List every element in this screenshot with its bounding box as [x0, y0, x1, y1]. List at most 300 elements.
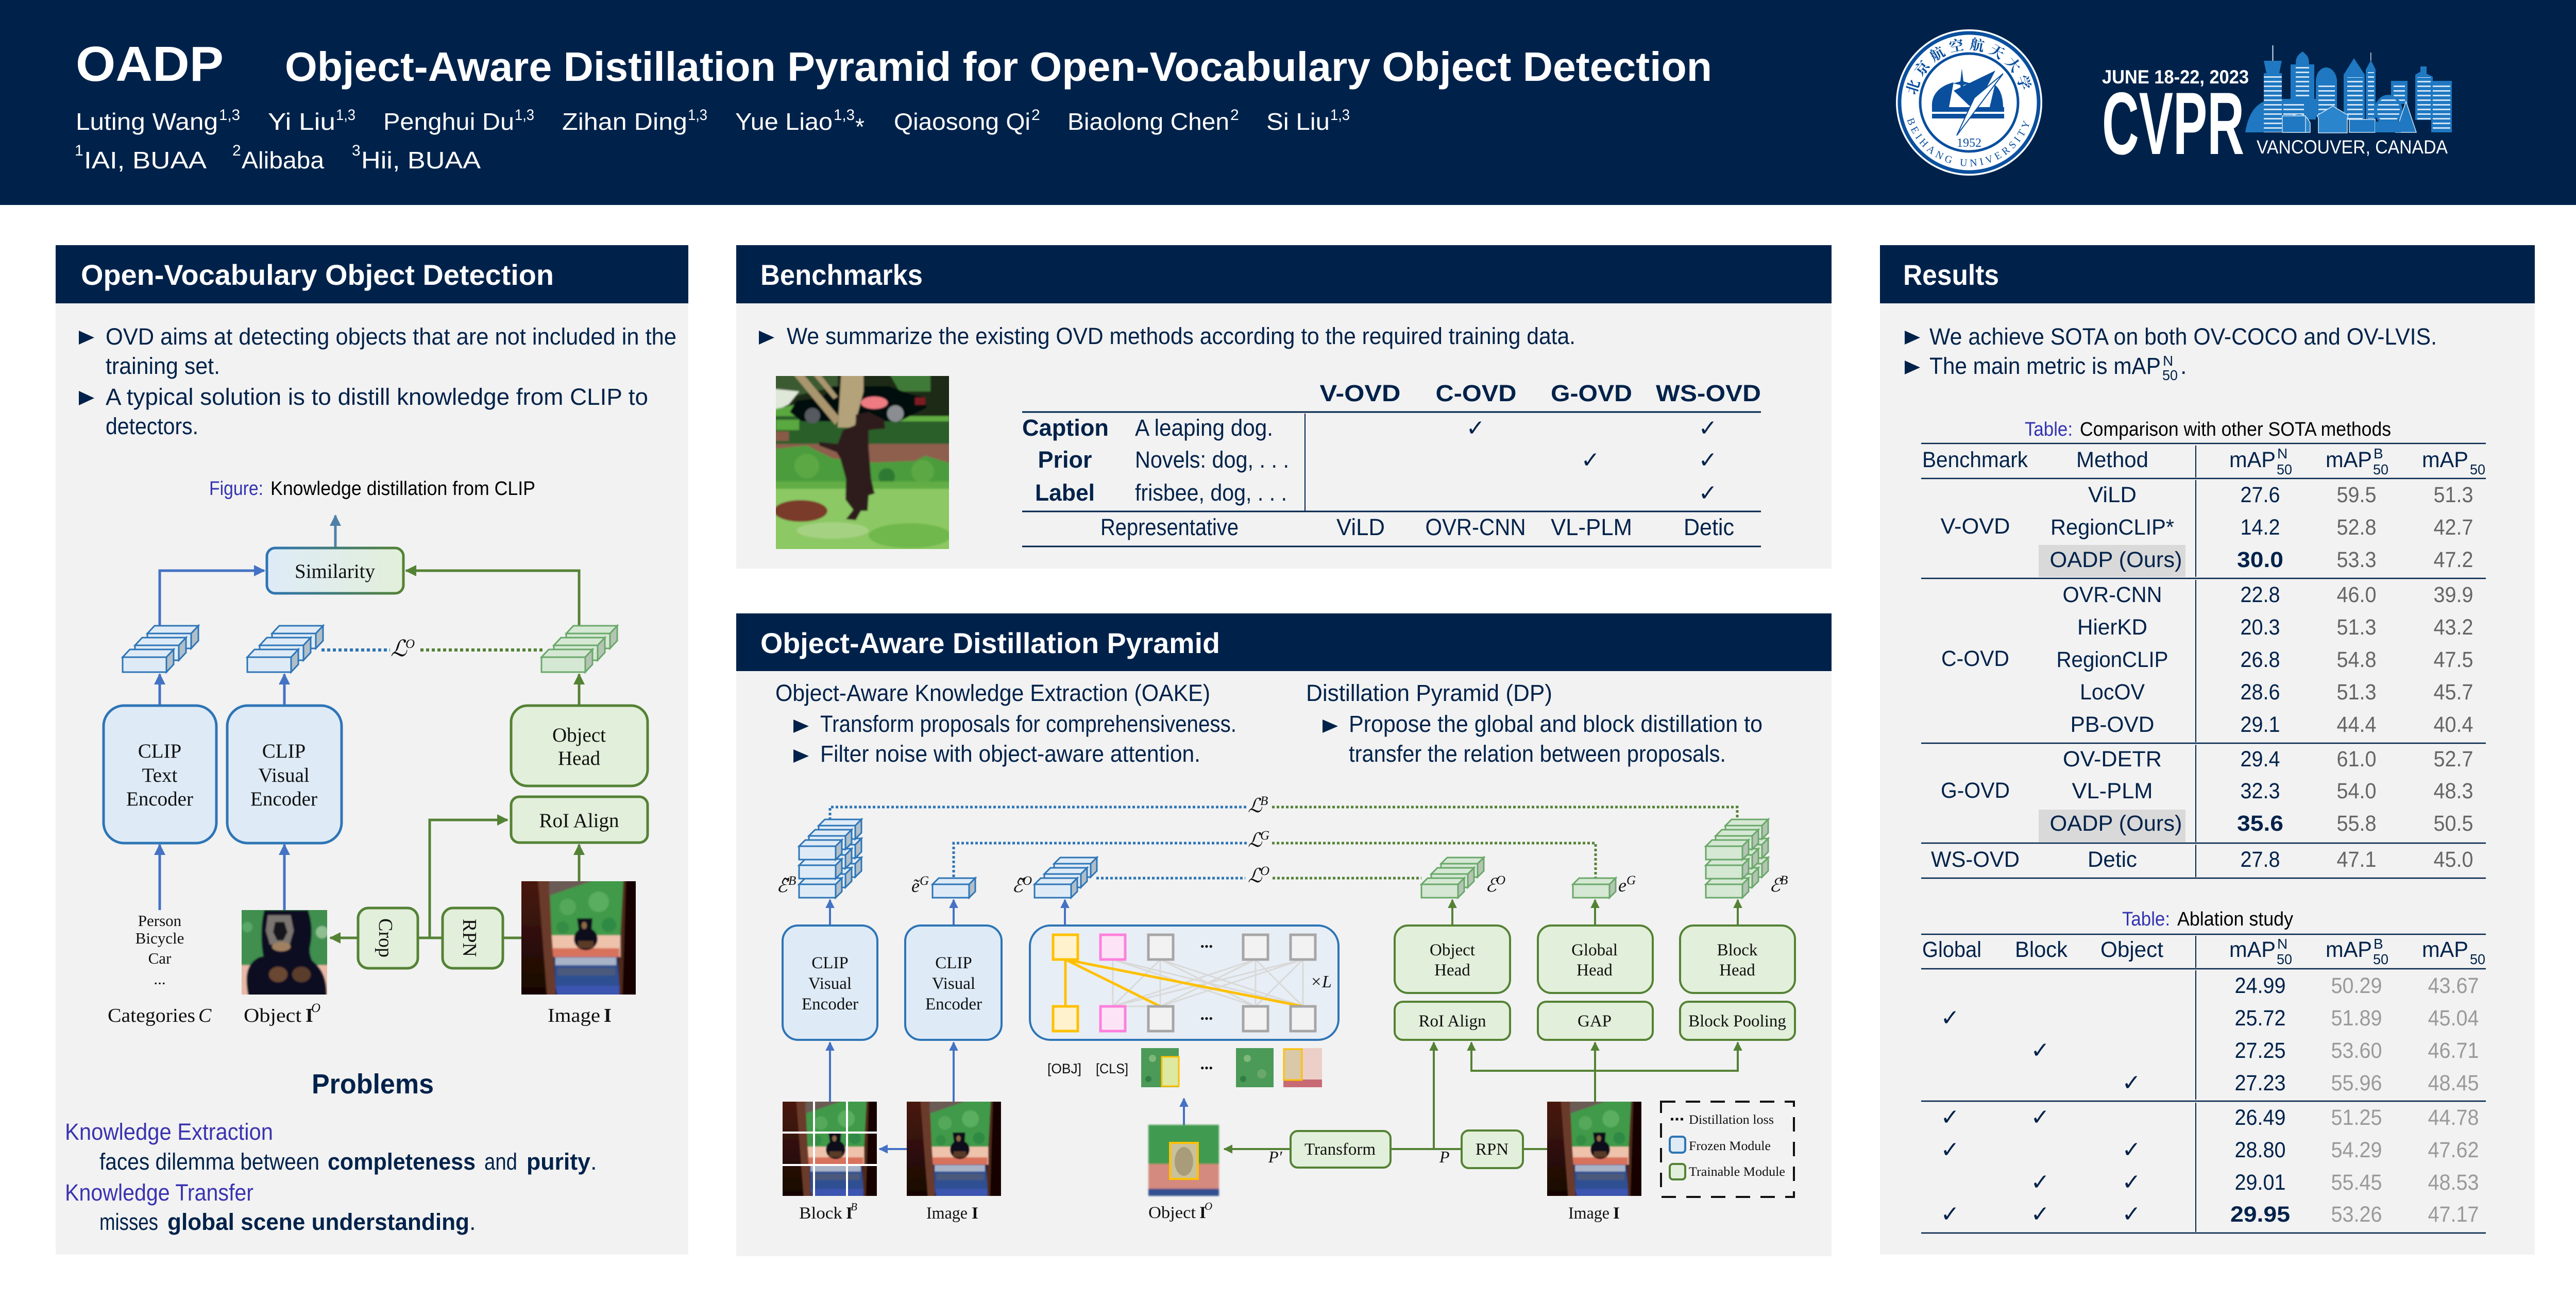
box: object head: Object — [1430, 941, 1475, 960]
table header: WS-OVD — [1656, 380, 1761, 406]
affiliations: Hii, BUAA — [361, 147, 481, 174]
values: mAP N50: 27.6 — [2240, 483, 2280, 507]
values: mAP N50: 20.3 — [2240, 615, 2280, 640]
bullet text — [1905, 323, 2437, 383]
box: CLIP visual encoder: Visual — [258, 764, 310, 786]
text: example categories: Bicycle — [135, 929, 184, 947]
photo: image — [1545, 1100, 1643, 1198]
authors: 1,3 — [834, 107, 855, 124]
feature stack: student object — [1421, 858, 1484, 898]
authors: Si Liu — [1266, 108, 1330, 135]
figure caption: Figure: — [209, 478, 263, 500]
feature stack: teacher object — [1035, 858, 1097, 898]
labels: inputs: O — [311, 1001, 320, 1015]
text block: problems: Knowledge Transfer — [65, 1179, 253, 1206]
bullet text: . — [2180, 353, 2187, 379]
bullet text block: training set. — [106, 353, 220, 379]
check marks: ✓ — [1941, 1005, 1959, 1031]
feature labels: teacher: ẽ — [911, 876, 920, 896]
check marks: ✓ — [2122, 1137, 2141, 1163]
box: Crop — [358, 908, 418, 968]
panel heading: Object-Aware Distillation Pyramid — [760, 627, 1220, 659]
authors: Luting Wang — [76, 108, 218, 135]
distillation loss lines: ℒ — [1248, 865, 1263, 887]
box: RPN: RPN — [1476, 1140, 1509, 1159]
legend: Frozen Module — [1689, 1139, 1771, 1153]
loss: distillation L^O — [321, 636, 543, 661]
values: mAP N50: 22.8 — [2240, 583, 2280, 607]
values: mAP N50: 25.72 — [2235, 1006, 2285, 1031]
arrow: text feature to similarity — [160, 571, 264, 626]
distillation loss lines: ℒ — [1248, 795, 1263, 817]
text: example categories: Person — [138, 912, 182, 930]
panel heading: Results — [1903, 259, 1999, 291]
labels: input images — [799, 1200, 1620, 1223]
values: mAP N50 — [2230, 973, 2290, 1227]
table header: 50 — [2373, 951, 2388, 967]
benchmark labels: V-OVD — [1940, 514, 2010, 539]
labels: input images: I — [1613, 1204, 1620, 1223]
table caption: ablation: Table: — [2122, 909, 2170, 930]
text block: DP — [1306, 680, 1762, 767]
table row: representative: ViLD — [1336, 514, 1385, 540]
table row: representative: VL-PLM — [1551, 514, 1632, 540]
distillation loss lines — [830, 794, 1737, 887]
method names: PB-OVD — [2070, 712, 2155, 737]
bullet text: We achieve SOTA on both OV-COCO and OV-LVIS. — [1929, 323, 2437, 350]
method names: OVR-CNN — [2063, 583, 2162, 607]
values: mAP 50: 42.7 — [2434, 515, 2473, 540]
photo: cropped dog — [242, 910, 327, 995]
box: RoI Align: RoI Align — [1418, 1012, 1486, 1031]
box: Transform — [1291, 1131, 1391, 1168]
box: CLIP text encoder — [104, 706, 216, 843]
bullet text block: detectors. — [106, 413, 198, 439]
affiliations: 2 — [232, 142, 241, 159]
header banner — [0, 0, 2576, 205]
labels: input images: O — [1205, 1200, 1212, 1212]
text block: problems: misses — [99, 1209, 158, 1235]
arrows: trainable path: P′ — [1268, 1147, 1283, 1166]
check marks: ✓ — [2031, 1104, 2049, 1130]
box: object head: Head — [558, 747, 601, 769]
benchmark labels — [1931, 514, 2020, 872]
text block: problems: purity — [527, 1149, 590, 1175]
photo: leaping dog — [773, 373, 952, 552]
check marks: ✓ — [1941, 1104, 1959, 1130]
box: CLIP visual encoder (image): Encoder — [925, 995, 982, 1014]
feature labels: student — [1485, 873, 1788, 896]
labels: inputs: Object — [244, 1005, 301, 1026]
table row: representative: Detic — [1684, 514, 1734, 540]
panel heading — [56, 245, 688, 303]
values: mAP B50: 54.8 — [2337, 647, 2376, 672]
feature stack: student block — [1706, 819, 1768, 898]
legend: Trainable Module — [1689, 1165, 1785, 1179]
labels: inputs — [108, 1001, 612, 1026]
text block: problems: . — [469, 1209, 476, 1235]
check marks: ✓ — [2122, 1169, 2141, 1195]
table row: caption — [1022, 415, 1717, 441]
text block: problems: faces dilemma between — [99, 1149, 319, 1175]
values: mAP B50: 55.96 — [2331, 1071, 2382, 1095]
values: mAP 50: 45.7 — [2434, 680, 2473, 705]
arrows: trainable path — [1224, 900, 1738, 1166]
distillation loss lines: O — [1260, 864, 1269, 878]
box: RoI Align — [511, 797, 648, 843]
method names: RegionCLIP* — [2050, 515, 2174, 540]
logo: Beihang University seal — [1896, 29, 2042, 176]
table row: caption: Caption — [1022, 415, 1109, 441]
box: CLIP visual encoder: CLIP — [262, 740, 306, 762]
values: mAP B50: 55.45 — [2331, 1170, 2382, 1195]
distillation loss lines: G — [1260, 829, 1269, 843]
values: mAP N50: 27.25 — [2235, 1038, 2285, 1063]
values: mAP B50: 44.4 — [2337, 712, 2376, 737]
values: mAP 50 — [2434, 483, 2473, 872]
table row: label — [1035, 479, 1717, 506]
values: mAP B50: 53.26 — [2331, 1202, 2382, 1227]
affiliations: IAI, BUAA — [84, 147, 207, 174]
feature labels: teacher: G — [920, 874, 929, 888]
values: mAP N50: 29.95 — [2230, 1202, 2290, 1227]
box: CLIP visual encoder (block): Visual — [808, 974, 852, 993]
logo: Beihang University seal: 北京航空航天大学 — [1906, 37, 2032, 95]
values: mAP 50: 47.2 — [2434, 547, 2473, 572]
table header: Block — [2015, 937, 2067, 962]
box: Block Pooling: Block Pooling — [1688, 1012, 1786, 1031]
check marks — [1941, 1005, 2141, 1227]
affiliations: 3 — [352, 142, 361, 159]
text block: OAKE: Transform proposals for comprehensiveness. — [820, 711, 1236, 737]
table header: C-OVD — [1435, 380, 1517, 406]
method names: VL-PLM — [2072, 779, 2153, 803]
table header: mAP — [2326, 937, 2372, 962]
table: comparison with SOTA methods — [1921, 443, 2486, 878]
box: CLIP visual encoder (image): CLIP — [935, 954, 972, 972]
tokens under transformer: ... — [1200, 1055, 1213, 1073]
bullet text: N — [2163, 353, 2173, 369]
authors: 1,3 — [219, 107, 240, 124]
table header: G-OVD — [1551, 380, 1632, 406]
box: object head: Object — [552, 724, 606, 746]
table header: mAP — [2326, 448, 2372, 472]
box: similarity: Similarity — [295, 560, 375, 583]
values: mAP B50: 46.0 — [2337, 583, 2376, 607]
logo: CVPR 2023 — [2102, 45, 2452, 173]
box: object head — [1395, 926, 1510, 993]
table header — [1922, 936, 2485, 967]
text: example categories: ... — [154, 970, 166, 988]
box: global head — [1538, 926, 1653, 993]
bullet text: 50 — [2162, 367, 2178, 383]
values: mAP 50: 47.5 — [2434, 647, 2473, 672]
arrows: encoders to features — [160, 674, 579, 706]
values: mAP B50: 54.29 — [2331, 1138, 2382, 1162]
table header: Method — [2076, 448, 2148, 472]
text: example categories: Car — [148, 949, 172, 967]
check marks: ✓ — [1941, 1137, 1959, 1163]
affiliations: 1 — [75, 142, 83, 159]
box: object head — [511, 706, 648, 786]
check marks: ✓ — [2031, 1037, 2049, 1064]
box: CLIP text encoder: Text — [142, 764, 178, 786]
values: mAP B50: 51.3 — [2337, 680, 2376, 705]
method names: OADP (Ours) — [2049, 811, 2182, 836]
values: mAP 50: 50.5 — [2434, 811, 2473, 836]
box: GAP — [1538, 1002, 1653, 1040]
values: mAP 50: 45.0 — [2434, 847, 2473, 872]
text block: DP: Propose the global and block distillation to — [1349, 711, 1762, 737]
check marks: ✓ — [2122, 1070, 2141, 1096]
feature stack: teacher block — [799, 819, 861, 898]
loss: distillation L^O: ℒ — [391, 636, 408, 661]
labels: input images: Image — [926, 1204, 968, 1223]
benchmark labels: WS-OVD — [1931, 847, 2020, 872]
table row: caption: A leaping dog. — [1135, 415, 1273, 441]
tokens under transformer: [OBJ] — [1047, 1061, 1081, 1076]
box: Crop: Crop — [375, 918, 396, 957]
authors: * — [855, 113, 865, 140]
panel heading — [736, 613, 1832, 671]
authors: 1,3 — [1330, 107, 1350, 124]
feature labels: teacher: B — [788, 874, 796, 888]
authors: 1,3 — [515, 107, 534, 124]
table header — [1922, 446, 2485, 477]
table header: Global — [1922, 937, 1981, 962]
tokens under transformer: [CLS] — [1096, 1061, 1128, 1076]
box: block head: Head — [1719, 961, 1755, 980]
table header: mAP — [2229, 937, 2276, 962]
table row: label: ✓ — [1699, 480, 1717, 506]
authors: Biaolong Chen — [1067, 108, 1229, 135]
values: mAP B50: 59.5 — [2337, 483, 2376, 507]
box: Block Pooling — [1680, 1002, 1795, 1040]
bullet text block — [79, 323, 676, 439]
feature labels: student: B — [1780, 873, 1788, 887]
photo: image — [905, 1100, 1003, 1198]
diagram: knowledge distillation from CLIP — [104, 516, 648, 1026]
feature: teacher global — [933, 878, 975, 898]
table caption: ablation — [2122, 909, 2293, 930]
table row: representative: OVR-CNN — [1425, 514, 1526, 540]
method names: LocOV — [2080, 680, 2145, 705]
photo: input image — [519, 879, 638, 997]
loss: distillation L^O: O — [405, 637, 415, 651]
affiliations — [75, 142, 481, 174]
values: mAP 50: 39.9 — [2434, 583, 2473, 607]
feature labels: teacher — [776, 874, 1032, 896]
values: mAP 50: 48.3 — [2434, 779, 2473, 803]
text block: problems: Knowledge Extraction — [65, 1119, 273, 1145]
values: mAP N50: 24.99 — [2235, 973, 2285, 998]
table header: B — [2374, 936, 2383, 952]
labels: inputs: Categories — [108, 1005, 195, 1026]
labels: inputs: I — [306, 1005, 313, 1026]
values: mAP N50: 32.3 — [2240, 779, 2280, 803]
method names: ViLD — [2088, 483, 2137, 507]
panel heading: Benchmarks — [760, 259, 923, 291]
labels: input images: Object — [1148, 1204, 1196, 1222]
arrows: inputs — [160, 820, 579, 938]
table header: N — [2277, 446, 2287, 461]
values: mAP B50: 53.60 — [2331, 1038, 2382, 1063]
values: mAP 50: 48.53 — [2428, 1170, 2479, 1195]
table header: mAP — [2422, 448, 2468, 472]
values: mAP B50: 47.1 — [2337, 847, 2376, 872]
values: mAP 50: 43.67 — [2428, 973, 2479, 998]
logo: CVPR 2023: CVPR — [2102, 74, 2244, 173]
feature labels: student: ℰ — [1485, 875, 1498, 896]
values: mAP 50: 51.3 — [2434, 483, 2473, 507]
table caption: comparison: Table: — [2025, 419, 2073, 440]
feature stack: visual — [247, 626, 323, 672]
logo: CVPR 2023: JUNE 18-22, 2023 — [2102, 66, 2249, 88]
values: mAP N50: 14.2 — [2240, 515, 2280, 540]
check marks: ✓ — [2031, 1201, 2049, 1227]
method names: OADP (Ours) — [2049, 547, 2182, 572]
table row: prior — [1038, 447, 1717, 473]
feature stack: object — [541, 626, 617, 672]
labels: inputs: Image — [548, 1005, 600, 1026]
check marks: ✓ — [2031, 1169, 2049, 1195]
method names: RegionCLIP — [2057, 647, 2168, 672]
table row: prior: ✓ — [1581, 447, 1600, 473]
distillation loss lines: ℒ — [1248, 830, 1263, 851]
authors: 1,3 — [688, 107, 707, 124]
values: mAP N50: 30.0 — [2237, 547, 2283, 572]
box: RPN: RPN — [459, 919, 480, 957]
values: mAP N50: 27.8 — [2240, 847, 2280, 872]
table header: mAP — [2422, 937, 2468, 962]
logo: Beihang University seal: BEIHANG UNIVERSITY — [1907, 117, 2030, 167]
values: mAP B50: 51.25 — [2331, 1105, 2382, 1130]
values: mAP 50: 40.4 — [2434, 712, 2473, 737]
values: mAP N50 — [2237, 483, 2283, 872]
table header: V-OVD — [1320, 380, 1400, 406]
table row: representative: Representative — [1100, 514, 1239, 540]
table caption: comparison: Comparison with other SOTA methods — [2080, 419, 2391, 440]
feature labels: teacher: O — [1023, 874, 1032, 888]
feature labels: teacher: ℰ̃ — [776, 876, 790, 896]
labels: input images: B — [851, 1201, 857, 1213]
diagram: OADP architecture — [776, 794, 1795, 1223]
table row: label: frisbee, dog, . . . — [1135, 479, 1287, 506]
box: CLIP visual encoder (block) — [783, 926, 877, 1040]
values: mAP 50: 47.17 — [2428, 1202, 2479, 1227]
values: mAP B50: 55.8 — [2337, 811, 2376, 836]
box: CLIP visual encoder (block): CLIP — [811, 954, 849, 972]
box: object head: Head — [1434, 961, 1470, 980]
text block: problems: . — [590, 1149, 597, 1175]
box: CLIP visual encoder (block): Encoder — [802, 995, 858, 1014]
box: RPN — [1462, 1130, 1523, 1168]
check marks: ✓ — [2122, 1201, 2141, 1227]
labels: input images: I — [1199, 1204, 1206, 1222]
feature: student global — [1573, 878, 1616, 898]
box: RoI Align: RoI Align — [539, 810, 619, 832]
panel heading — [1880, 245, 2535, 303]
affiliations: Alibaba — [242, 147, 324, 174]
values: mAP 50: 52.7 — [2434, 747, 2473, 772]
box: CLIP text encoder: CLIP — [138, 740, 181, 762]
method names: Detic — [2088, 847, 2137, 872]
authors: Qiaosong Qi — [894, 108, 1030, 135]
table header: 50 — [2470, 951, 2485, 967]
table row: prior: Prior — [1038, 447, 1092, 473]
values: mAP 50: 45.04 — [2428, 1006, 2479, 1031]
table row: caption: ✓ — [1699, 415, 1717, 441]
box: object-aware transformer — [1030, 926, 1338, 1040]
arrows: trainable path: P — [1439, 1147, 1450, 1166]
values: mAP 50: 46.71 — [2428, 1038, 2479, 1063]
labels: inputs: I — [604, 1005, 612, 1026]
panel heading — [736, 245, 1832, 303]
values: mAP B50: 52.8 — [2337, 515, 2376, 540]
bullet text block: A typical solution is to distill knowledge from CLIP to — [106, 384, 648, 410]
arrows: teacher — [830, 900, 1184, 1149]
table header: Benchmark — [1922, 448, 2028, 472]
bullet text block: OVD aims at detecting objects that are not included in the — [106, 323, 676, 350]
text block: problems: and — [484, 1149, 517, 1175]
box: CLIP visual encoder — [227, 706, 342, 843]
authors: Yue Liao — [735, 108, 833, 135]
table header: 50 — [2373, 461, 2388, 477]
figure caption: Knowledge distillation from CLIP — [270, 478, 535, 500]
icon: Vancouver skyline — [2245, 45, 2452, 133]
values: mAP N50: 29.01 — [2235, 1170, 2285, 1195]
feature labels: student: ℰ — [1769, 875, 1782, 896]
values: mAP B50: 51.89 — [2331, 1006, 2382, 1031]
box: CLIP visual encoder: Encoder — [250, 788, 317, 810]
arrow: object feature to similarity — [406, 571, 579, 626]
box: global head: Global — [1571, 941, 1618, 960]
benchmark labels: G-OVD — [1941, 778, 2010, 803]
box: GAP: GAP — [1578, 1012, 1612, 1031]
panel: Object-Aware Distillation Pyramid — [736, 613, 1832, 1256]
values: mAP N50: 29.1 — [2240, 712, 2280, 737]
table header: 50 — [2277, 951, 2292, 967]
logo: Beihang University seal: 1952 — [1957, 136, 1981, 150]
panel heading: Open-Vocabulary Object Detection — [81, 259, 554, 291]
method names: HierKD — [2077, 615, 2147, 640]
text: example categories — [135, 912, 184, 988]
tokens under transformer — [1047, 1048, 1322, 1087]
feature labels: student: e — [1618, 875, 1626, 896]
values: mAP N50: 29.4 — [2240, 747, 2280, 772]
title: paper name: Object-Aware Distillation Pyramid for Open-Vocabulary Object Detection — [285, 44, 1712, 90]
values: mAP B50: 53.3 — [2337, 547, 2376, 572]
box: block head — [1680, 926, 1795, 993]
text block: problems: completeness — [328, 1149, 476, 1175]
values: mAP N50: 28.6 — [2240, 680, 2280, 705]
box: object-aware transformer: ×L — [1310, 972, 1332, 991]
table header: Object — [2100, 937, 2163, 962]
box: block head: Block — [1717, 941, 1758, 960]
values: mAP B50: 54.0 — [2337, 779, 2376, 803]
values: mAP N50: 26.8 — [2240, 647, 2280, 672]
values: mAP B50: 50.29 — [2331, 973, 2382, 998]
box: RoI Align — [1395, 1002, 1510, 1040]
table header: 50 — [2470, 461, 2485, 477]
text block: problems — [65, 1119, 597, 1235]
labels: input images: Image — [1568, 1204, 1609, 1223]
authors: 2 — [1031, 107, 1040, 124]
logo: CVPR 2023: VANCOUVER, CANADA — [2257, 136, 2448, 158]
panel: Benchmarks — [736, 245, 1832, 569]
method names — [2049, 483, 2182, 872]
panel: Open-Vocabulary Object Detection — [56, 245, 688, 1255]
